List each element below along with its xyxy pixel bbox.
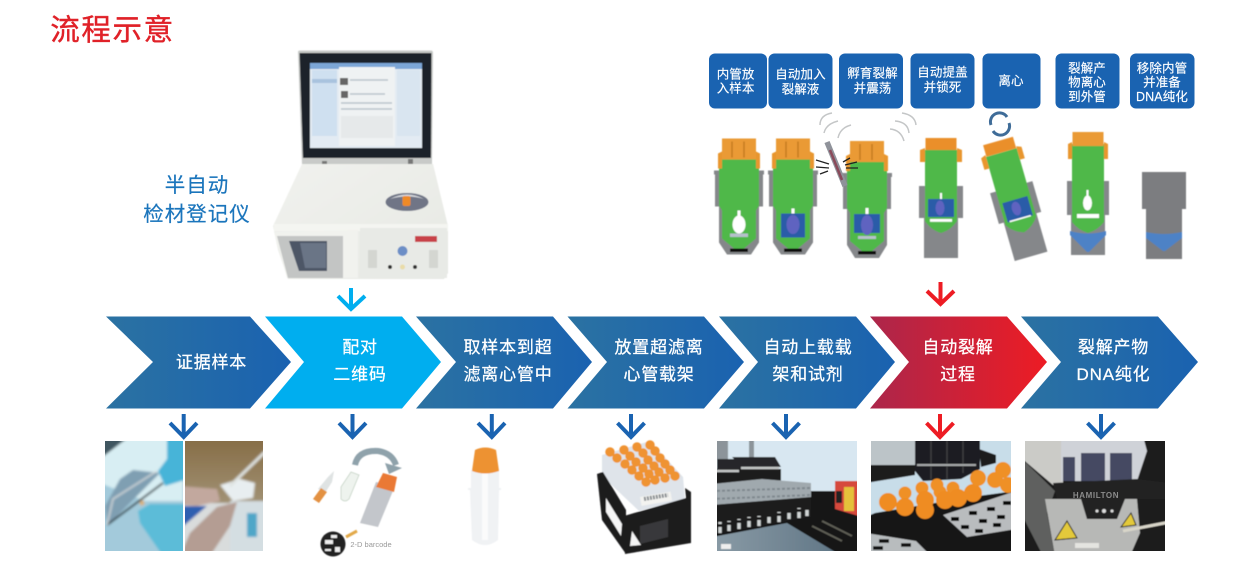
arrow: lysis detail to step 6	[927, 282, 954, 304]
step 3	[416, 316, 592, 408]
step 2: 二维码	[333, 365, 387, 384]
title: 流程示意	[50, 14, 175, 47]
tube 3	[842, 141, 892, 258]
step 5	[719, 316, 895, 408]
tube 6	[1067, 132, 1109, 255]
step 1	[106, 316, 291, 408]
step box: 移除内管并准备DNA纯化	[1130, 54, 1194, 108]
step box: 内管放入样本	[709, 54, 767, 108]
step box: 内管放入样本: 入样本	[717, 80, 755, 96]
step box: 内管放入样本: 内管放	[717, 66, 755, 82]
tube 2	[768, 138, 818, 254]
step 7: 裂解产物	[1078, 338, 1149, 357]
tube 1	[714, 138, 764, 254]
step box: 裂解产物离心到外管: 物离心	[1068, 74, 1106, 90]
tray label: HAMILTON	[1073, 491, 1119, 500]
step box: 裂解产物离心到外管	[1056, 54, 1120, 108]
illustration: swab to tube with 2D barcode	[313, 451, 402, 556]
instrument label: 半自动	[165, 174, 229, 197]
instrument label: 检材登记仪	[143, 203, 251, 226]
step 6: 自动裂解	[922, 338, 994, 357]
tube 4	[919, 138, 963, 258]
tube 5 tilted	[977, 135, 1052, 262]
step box: 孵育裂解并震荡: 并震荡	[854, 82, 891, 96]
down arrows	[170, 414, 1114, 437]
icon: vortex mixer and vibration waves	[816, 113, 916, 186]
step box: 离心: 离心	[998, 73, 1024, 88]
step box: 裂解产物离心到外管: 到外管	[1068, 89, 1106, 104]
step box: 自动加入裂解液	[768, 54, 832, 108]
rack front face	[624, 488, 691, 554]
step 6: 过程	[940, 365, 976, 384]
photo: tube rack	[597, 441, 691, 554]
instrument: semi-automatic sample register	[273, 50, 448, 279]
step box: 自动提盖并锁死: 自动提盖	[917, 64, 968, 80]
step box: 裂解产物离心到外管: 裂解产	[1068, 62, 1106, 76]
step box: 移除内管并准备DNA纯化: 移除内管	[1137, 60, 1187, 76]
photo: instrument deck loading	[717, 441, 857, 551]
step boxes	[709, 54, 1194, 108]
instrument label	[143, 174, 251, 226]
step box: 离心	[982, 54, 1040, 108]
photo: automated lysis caps	[871, 441, 1011, 551]
step box: 自动提盖并锁死	[910, 54, 974, 108]
step box: 自动加入裂解液: 自动加入	[775, 68, 826, 82]
step box: 孵育裂解并震荡	[839, 54, 903, 108]
lysis tubes illustration	[714, 132, 1186, 262]
icon: centrifuge rotation	[990, 113, 1010, 135]
step box: 孵育裂解并震荡: 孵育裂解	[847, 66, 898, 80]
step 1: 证据样本	[176, 353, 247, 372]
step 6	[870, 316, 1047, 408]
step 7: DNA纯化	[1077, 365, 1150, 384]
photo: evidence sample cutting	[105, 441, 183, 551]
step 5: 自动上载载	[764, 338, 852, 357]
step box: 自动提盖并锁死: 并锁死	[924, 80, 961, 94]
process chevrons	[106, 316, 1198, 408]
step 4: 放置超滤离	[614, 338, 704, 357]
tube 7 outer only	[1142, 172, 1186, 259]
step box: 移除内管并准备DNA纯化: DNA纯化	[1136, 90, 1188, 104]
step 5: 架和试剂	[772, 365, 844, 384]
step box: 移除内管并准备DNA纯化: 并准备	[1143, 76, 1181, 90]
step box: 自动加入裂解液: 裂解液	[782, 82, 820, 96]
photo: sample swab handling	[185, 441, 263, 551]
step 4	[568, 316, 744, 408]
step 3: 取样本到超	[464, 338, 552, 357]
step 3: 滤离心管中	[464, 365, 552, 384]
rack left face	[597, 472, 626, 554]
photo: DNA purification deck	[1025, 441, 1165, 551]
step 2	[265, 316, 441, 408]
step 4: 心管载架	[623, 365, 695, 384]
barcode caption: 2-D barcode	[350, 540, 392, 549]
step 7	[1021, 316, 1198, 408]
photo: ultrafiltration tube	[468, 448, 501, 545]
step 2: 配对	[342, 338, 378, 357]
arrow: instrument to barcode step	[338, 288, 365, 309]
